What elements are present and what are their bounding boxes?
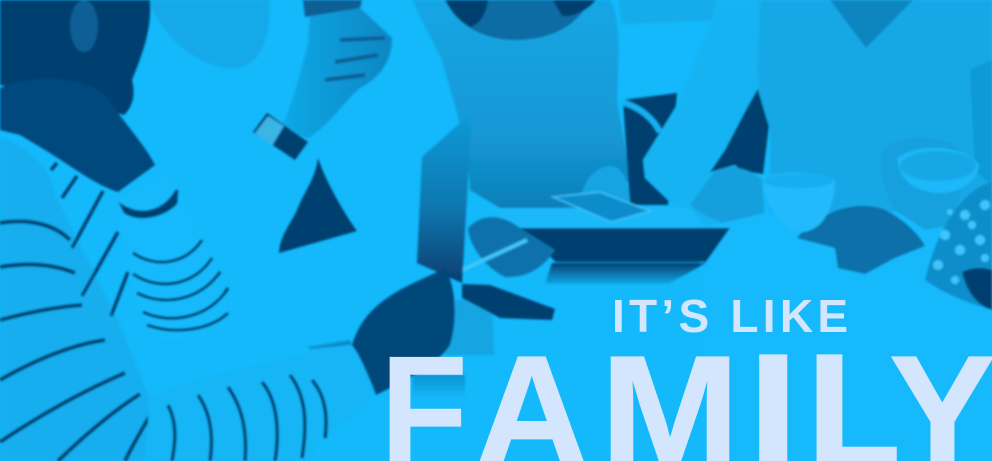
finger shadows [325,38,385,80]
notebook [445,300,494,355]
smartwatch [253,113,308,160]
tablet held upright [417,112,472,283]
hand over phone [582,166,630,207]
table top behind tablet [496,208,705,228]
thumb [308,340,352,349]
chair [623,87,769,205]
arm stripes [133,240,228,330]
lower forearm [148,345,376,461]
phone on table [553,192,650,222]
right person arm [643,0,760,228]
left hand [0,79,155,192]
right person sweater [716,0,992,212]
plant [925,182,992,310]
phone 2 [462,284,555,320]
head [0,0,150,115]
left torso [0,137,150,461]
raised hand with cup [280,8,392,138]
lower hand [352,268,455,395]
raised striped forearm [115,170,230,341]
hand with stylus [468,217,555,277]
tablet [519,228,730,262]
chair arch [622,102,660,132]
cuff band [122,190,177,217]
centre person neck and hair [446,0,590,40]
table surface right [700,212,992,461]
hair [445,0,596,27]
shadow behind heading [413,375,465,398]
cup rim [303,0,362,17]
sleeve stripes [168,375,326,461]
right person neck [830,0,913,48]
person 2 neck [148,0,270,68]
hand holding cup 1 [690,167,765,228]
stylus [447,240,527,277]
tablet shadow [545,263,706,284]
back stripes [51,163,128,316]
centre person sweater [412,0,630,208]
right person arm shadow [970,60,992,185]
dark gap behind arm [279,158,357,253]
ear [70,0,98,52]
heading [380,322,992,461]
hand and cup 2 [881,137,979,230]
cup 1 [762,173,835,232]
hand holding cup 2 [797,206,925,274]
subheading: IT’S LIKE [612,290,848,342]
torso stripes [0,221,153,461]
window frame [618,0,716,24]
